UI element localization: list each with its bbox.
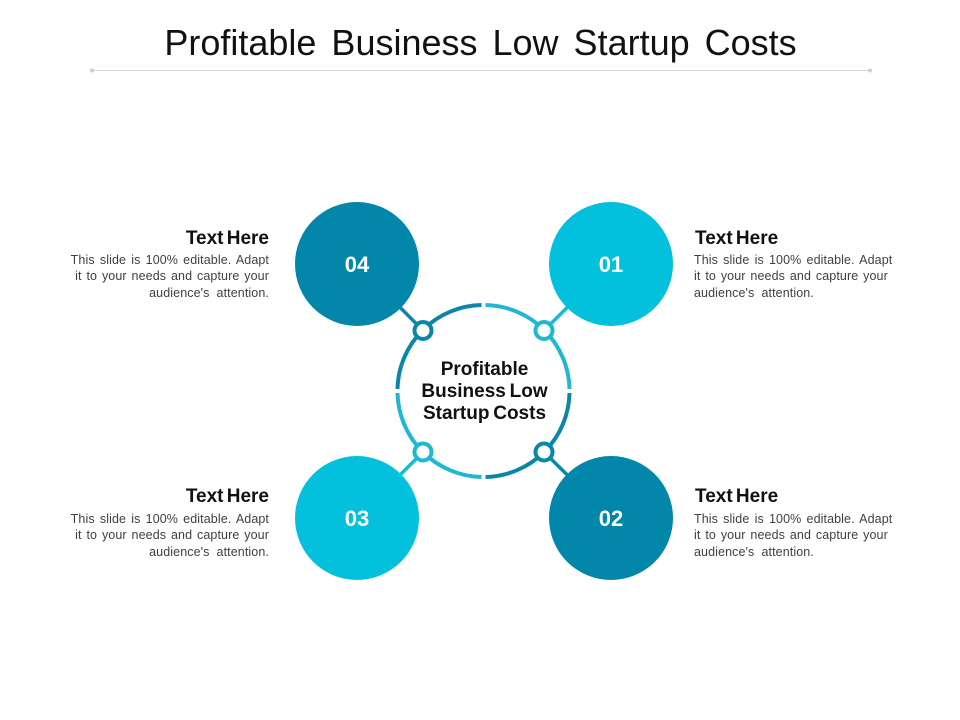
text block: bottom left: This slide is 100% editable. Adapt (71, 512, 269, 526)
text block: bottom left: Text Here (186, 486, 269, 507)
ring node: top left (414, 322, 432, 339)
text block: top left: This slide is 100% editable. Adapt (71, 253, 269, 267)
text block: bottom left: it to your needs and capture your (75, 528, 269, 542)
text block: top right: This slide is 100% editable. Adapt (694, 253, 893, 267)
text block: bottom right: audience's attention. (694, 545, 814, 559)
ring node: bottom left (414, 444, 432, 460)
text block: bottom right: Text Here (695, 486, 778, 507)
text block: top left: audience's attention. (149, 286, 269, 300)
central label: Startup Costs (423, 403, 546, 424)
title: Profitable Business Low Startup Costs (164, 22, 797, 63)
badge 02: 02 (599, 506, 623, 531)
badge 03: 03 (345, 506, 369, 531)
text block: top right: it to your needs and capture your (694, 269, 888, 283)
text block: top right (694, 228, 893, 300)
title divider (90, 68, 872, 72)
central label (421, 359, 548, 424)
connector lines (357, 264, 611, 518)
ring node: bottom right (536, 444, 552, 460)
text block: bottom left: audience's attention. (149, 545, 269, 559)
text block: top left: it to your needs and capture your (75, 269, 269, 283)
text block: bottom right: it to your needs and capture your (694, 528, 888, 542)
central ring (398, 305, 570, 477)
text block: bottom right (694, 486, 893, 559)
central label: Profitable (441, 359, 528, 380)
text block: top left: Text Here (186, 228, 269, 249)
badge 01: 01 (599, 252, 623, 277)
central label: Business Low (421, 381, 548, 402)
text block: bottom left (71, 486, 269, 559)
text block: top left (71, 228, 269, 300)
text block: bottom right: This slide is 100% editable. Adapt (694, 512, 893, 526)
badge 03 (295, 456, 419, 580)
badge 02 (549, 456, 673, 580)
ring node: top right (536, 322, 552, 339)
text block: top right: audience's attention. (694, 286, 814, 300)
text block: top right: Text Here (695, 228, 778, 249)
badge 04: 04 (345, 252, 370, 277)
badge 01 (549, 202, 673, 326)
badge 04 (295, 202, 419, 326)
